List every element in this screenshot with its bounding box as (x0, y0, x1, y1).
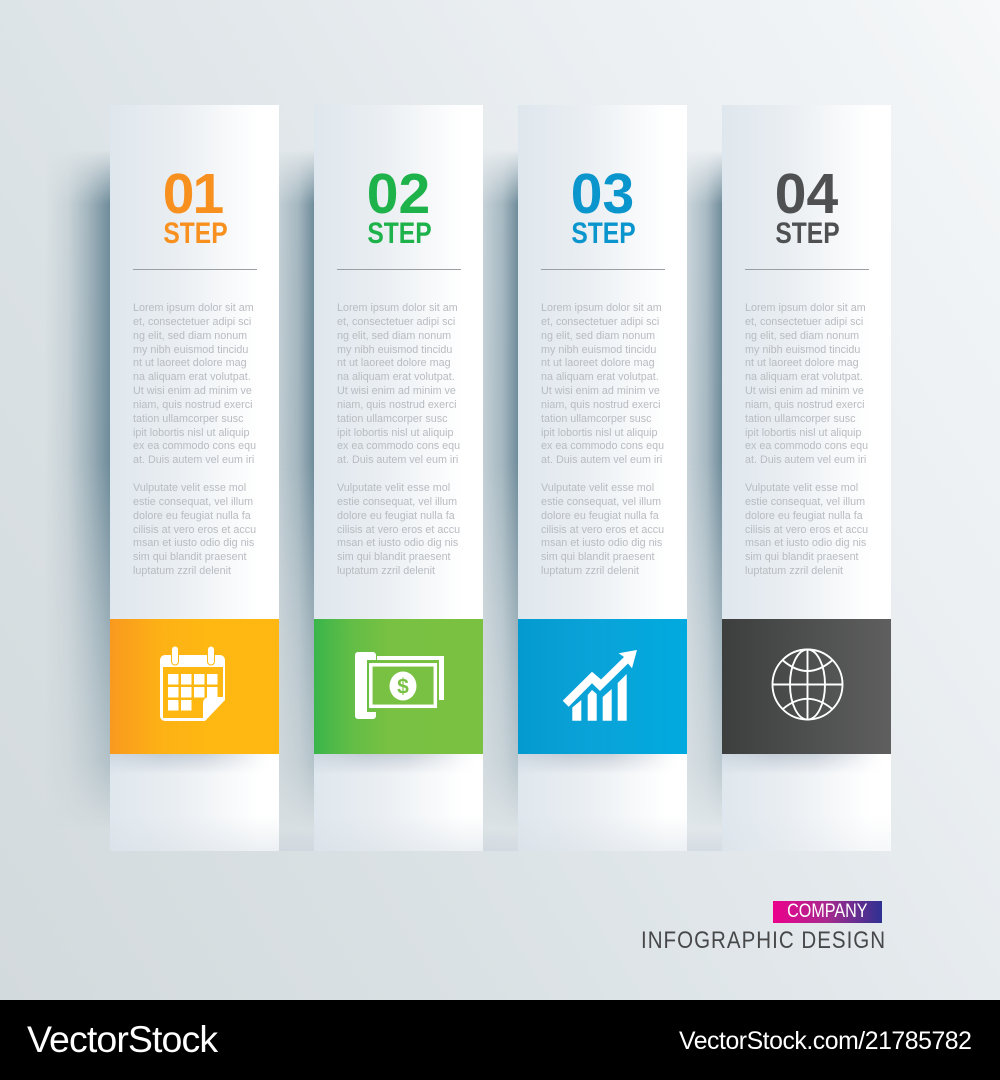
icon: money (355, 652, 444, 719)
watermark brand: VectorStock (27, 1018, 217, 1060)
panel: step 03 (518, 105, 687, 851)
icon: growth chart (562, 650, 637, 721)
colour band with money icon (314, 619, 483, 754)
colour band with calendar icon (110, 619, 279, 754)
panel: step 02 (314, 105, 483, 851)
label step: STEP (571, 216, 635, 250)
heading: infographic design: INFOGRAPHIC DESIGN (641, 927, 886, 954)
body text: Lorem ipsum dolor sit am et, consectetuer adipi sci ng elit, sed diam nonum my nibh euismod tincidu nt ut laoreet dolore mag na aliquam erat volutpat. Ut wisi enim ad minim ve niam, quis nostrud exerci tation ullamcorper susc ipit lobortis nisl ut aliquip ex ea commodo cons equ at. Duis autem vel eum iri Vulputate velit esse mol estie consequat, vel illum dolore eu feugiat nulla fa cilisis at vero eros et accu msan et iusto odio dig nis sim qui blandit praesent luptatum zzril delenit (745, 302, 868, 577)
colour band with growth chart icon (518, 619, 687, 754)
shadow: card 4 (687, 150, 722, 830)
number 02: 02 (367, 162, 430, 226)
label step: STEP (775, 216, 839, 250)
watermark id: VectorStock.com/21785782 (679, 1028, 971, 1055)
colour band with globe icon (722, 619, 891, 754)
panel: step 04 (722, 105, 891, 851)
label step: STEP (163, 216, 227, 250)
number 01: 01 (163, 162, 222, 226)
icon: globe (772, 648, 844, 720)
body text: Lorem ipsum dolor sit am et, consectetuer adipi sci ng elit, sed diam nonum my nibh euismod tincidu nt ut laoreet dolore mag na aliquam erat volutpat. Ut wisi enim ad minim ve niam, quis nostrud exerci tation ullamcorper susc ipit lobortis nisl ut aliquip ex ea commodo cons equ at. Duis autem vel eum iri Vulputate velit esse mol estie consequat, vel illum dolore eu feugiat nulla fa cilisis at vero eros et accu msan et iusto odio dig nis sim qui blandit praesent luptatum zzril delenit (337, 302, 460, 577)
shadow: card 2 (279, 150, 314, 830)
shadow: card 3 (483, 150, 518, 830)
dollar sign: $ (397, 676, 409, 698)
number 04: 04 (775, 162, 838, 226)
badge: company: COMPANY (787, 901, 868, 922)
label step: STEP (367, 216, 431, 250)
number 03: 03 (571, 162, 634, 226)
body text: Lorem ipsum dolor sit am et, consectetuer adipi sci ng elit, sed diam nonum my nibh euismod tincidu nt ut laoreet dolore mag na aliquam erat volutpat. Ut wisi enim ad minim ve niam, quis nostrud exerci tation ullamcorper susc ipit lobortis nisl ut aliquip ex ea commodo cons equ at. Duis autem vel eum iri Vulputate velit esse mol estie consequat, vel illum dolore eu feugiat nulla fa cilisis at vero eros et accu msan et iusto odio dig nis sim qui blandit praesent luptatum zzril delenit (541, 302, 664, 577)
panel: step 01 (110, 105, 279, 851)
footer bar (0, 1000, 1000, 1080)
icon: calendar (160, 646, 225, 721)
body text: Lorem ipsum dolor sit am et, consectetuer adipi sci ng elit, sed diam nonum my nibh euismod tincidu nt ut laoreet dolore mag na aliquam erat volutpat. Ut wisi enim ad minim ve niam, quis nostrud exerci tation ullamcorper susc ipit lobortis nisl ut aliquip ex ea commodo cons equ at. Duis autem vel eum iri Vulputate velit esse mol estie consequat, vel illum dolore eu feugiat nulla fa cilisis at vero eros et accu msan et iusto odio dig nis sim qui blandit praesent luptatum zzril delenit (133, 302, 256, 577)
shadow: card 1 (54, 154, 110, 816)
